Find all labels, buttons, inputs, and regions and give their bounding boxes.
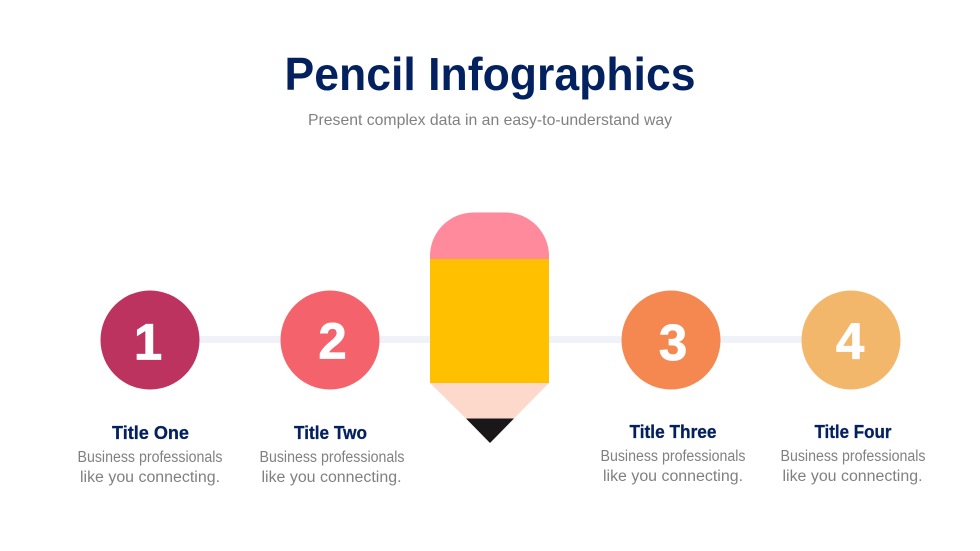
- description 3: Business professionals: [600, 448, 746, 465]
- pencil: [430, 212, 549, 443]
- description 1: [78, 449, 223, 486]
- title three: Title Three: [630, 421, 716, 442]
- title four: Title Four: [814, 421, 892, 442]
- title two: Title Two: [294, 422, 367, 443]
- circle 3: [622, 290, 720, 390]
- description 4: like you connecting.: [782, 468, 922, 485]
- number 3: 3: [659, 314, 687, 371]
- number 4: 4: [836, 312, 865, 370]
- description 4: [780, 448, 926, 485]
- title: Pencil Infographics: [284, 48, 696, 100]
- step 2: [260, 290, 405, 486]
- step 1: [78, 290, 223, 486]
- pencil body: [430, 259, 549, 383]
- pencil tip: [466, 418, 514, 443]
- description 2: Business professionals: [260, 449, 405, 466]
- connector line: [150, 336, 851, 343]
- description 3: [600, 448, 746, 485]
- description 4: Business professionals: [780, 448, 926, 465]
- description 1: Business professionals: [78, 449, 223, 466]
- description 3: like you connecting.: [603, 468, 743, 485]
- circle 4: [802, 290, 900, 390]
- number 2: 2: [318, 312, 347, 370]
- number 1: 1: [134, 314, 162, 370]
- description 1: like you connecting.: [80, 469, 220, 486]
- step 3: [600, 290, 746, 485]
- title one: Title One: [112, 422, 189, 443]
- subtitle: Present complex data in an easy-to-understand way: [308, 112, 672, 129]
- step 4: [780, 290, 926, 485]
- description 2: like you connecting.: [262, 469, 402, 486]
- circle 2: [280, 290, 380, 390]
- pencil eraser: [430, 212, 549, 259]
- description 2: [260, 449, 405, 486]
- pencil wood: [430, 383, 549, 418]
- circle 1: [100, 290, 200, 390]
